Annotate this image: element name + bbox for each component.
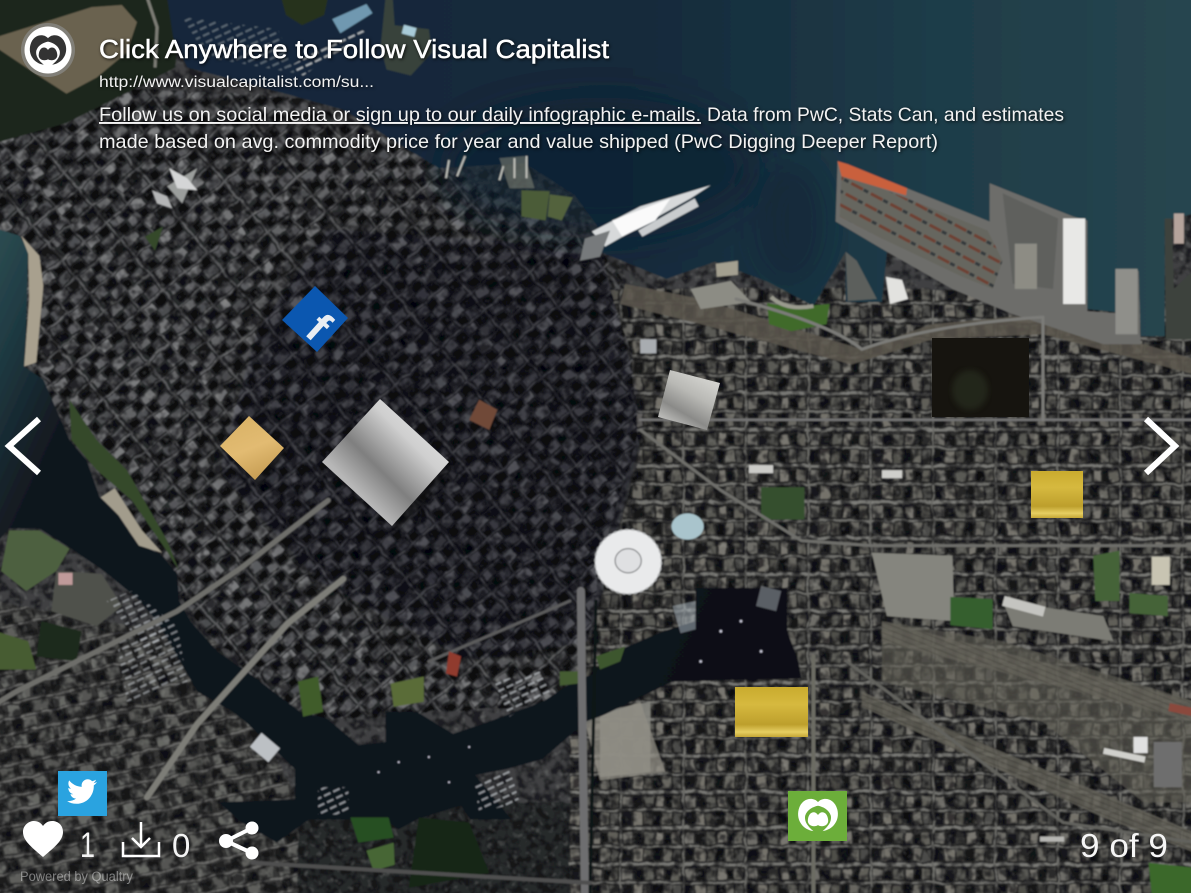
marker: gold square south [735, 687, 808, 737]
icon: download [123, 822, 159, 856]
map: creek-side parks [298, 487, 1194, 893]
map: BC Place stadium [595, 530, 661, 594]
icon: green logo [788, 791, 847, 841]
arrow: previous [9, 419, 39, 473]
marker: silver large [322, 399, 452, 532]
map: Science World dome [671, 513, 704, 540]
icon: like heart [23, 821, 63, 857]
map: Stanley Park [0, 0, 179, 143]
arrow: next [1146, 419, 1175, 473]
map: rail yards [600, 284, 1194, 853]
map: waterfront parks [145, 168, 830, 331]
marker: gold square east [1031, 471, 1083, 518]
title: Click Anywhere to Follow Visual Capitalist [99, 34, 610, 64]
map: water colour variation [439, 98, 827, 284]
icon: twitter [58, 771, 107, 816]
map: Burrard Inlet water [167, 0, 1194, 336]
description text: Data from PwC, Stats Can, and estimates [707, 104, 1064, 126]
map: downtown shadow wash [217, 229, 645, 661]
icon: share [220, 822, 258, 859]
marker: silver small [658, 370, 720, 430]
source url: http://www.visualcapitalist.com/su... [99, 74, 374, 91]
map: beaches and Kitsilano Point [0, 236, 179, 669]
marker: gold diamond [220, 416, 288, 486]
downloads count: 0 [172, 827, 190, 864]
map: roads and bridges [0, 299, 1194, 893]
marker: coal black [932, 338, 1029, 417]
icon: facebook [282, 286, 348, 352]
map: bright buildings [152, 168, 1194, 842]
map: Canada Place ships [580, 185, 711, 261]
icon: profile logo [21, 23, 75, 77]
map: Coal Harbour islands and marinas [182, 0, 535, 188]
likes count: 1 [80, 826, 95, 865]
map: container port [836, 161, 1194, 344]
credit: Powered by Qualtry [20, 869, 133, 884]
description text: Follow us on social media or sign up to our daily infographic e-mails. [99, 104, 701, 126]
map: marinas in False Creek [107, 586, 781, 814]
page counter: 9 of 9 [1080, 827, 1168, 864]
map: English Bay and False Creek water [0, 229, 801, 843]
description text [99, 104, 1064, 153]
description text: made based on avg. commodity price for year and value shipped (PwC Digging Deeper Report) [99, 131, 938, 153]
icon: facebook: f [296, 305, 340, 351]
